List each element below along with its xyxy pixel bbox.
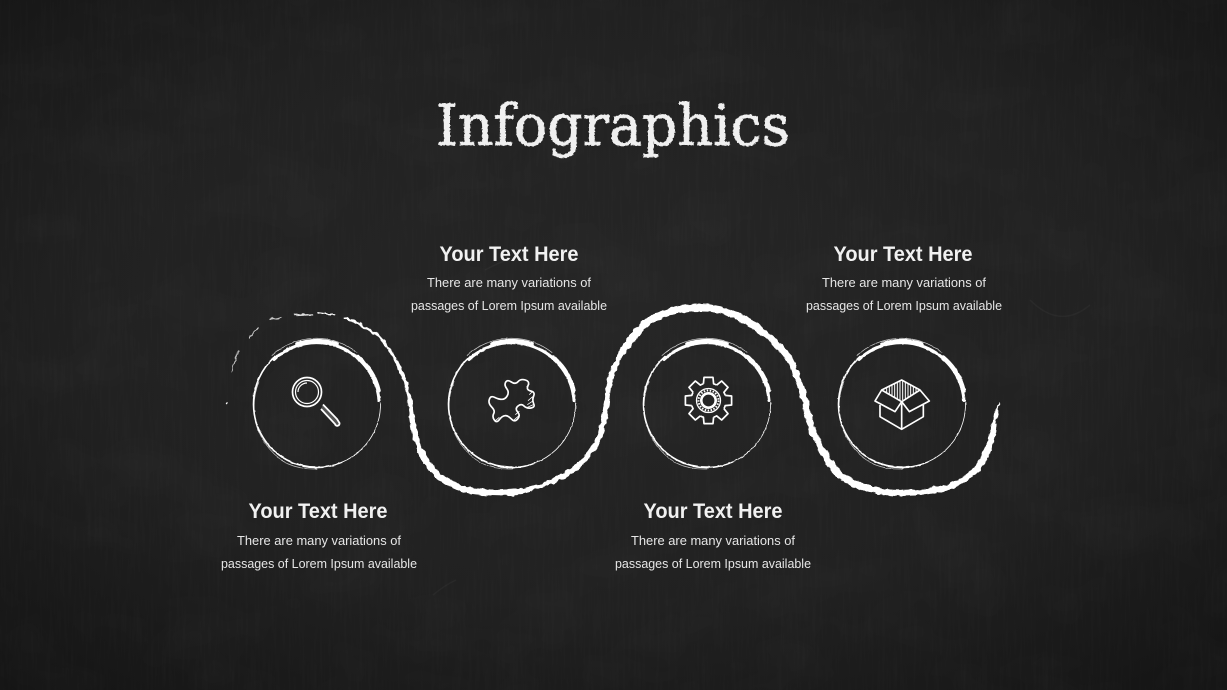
text block 4 — [806, 243, 1002, 313]
step 3: gear circle — [643, 338, 771, 469]
icon: gear — [685, 377, 732, 424]
step 2: puzzle circle — [448, 338, 576, 469]
title: Infographics — [436, 93, 790, 159]
heading 4: Your Text Here — [834, 243, 972, 266]
description 1: There are many variations of — [237, 534, 402, 548]
step 4: box circle — [838, 338, 966, 469]
description 1 — [221, 534, 417, 571]
description 4 — [806, 276, 1002, 313]
description 3: There are many variations of — [631, 534, 796, 548]
heading 3: Your Text Here — [644, 500, 782, 523]
ring 4 — [838, 338, 966, 469]
text block 3 — [615, 500, 811, 571]
ring 3 — [643, 338, 771, 469]
description 4: passages of Lorem Ipsum available — [806, 299, 1002, 313]
text block 2 — [411, 243, 607, 313]
description 3 — [615, 534, 811, 571]
text block 1 — [221, 500, 417, 571]
ring 2 — [448, 338, 576, 469]
heading 2: Your Text Here — [440, 243, 578, 266]
description 3: passages of Lorem Ipsum available — [615, 557, 811, 571]
icon: magnifying glass — [292, 378, 340, 426]
description 1: passages of Lorem Ipsum available — [221, 557, 417, 571]
icon: open box — [875, 380, 929, 429]
step 1: magnifier circle — [253, 338, 381, 469]
icon: puzzle piece — [489, 380, 534, 422]
ring 1 — [253, 338, 381, 469]
description 4: There are many variations of — [822, 276, 987, 290]
description 2: passages of Lorem Ipsum available — [411, 299, 607, 313]
winding chalk path — [226, 308, 999, 493]
description 2 — [411, 276, 607, 313]
description 2: There are many variations of — [427, 276, 592, 290]
heading 1: Your Text Here — [248, 500, 388, 523]
